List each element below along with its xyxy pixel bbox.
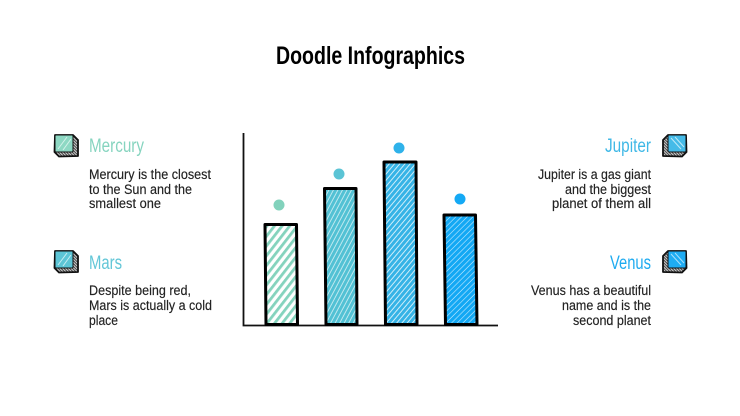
text: Mercury description	[89, 167, 211, 211]
text: Jupiter description: Jupiter is a gas giant	[538, 167, 651, 182]
title: Doodle Infographics	[276, 42, 465, 70]
icon: Mercury cube	[54, 135, 78, 156]
dot: Mercury	[274, 200, 284, 210]
text: Venus description: second planet	[573, 313, 651, 328]
bar: Mars	[324, 188, 357, 324]
heading: Mars: Mars	[89, 253, 122, 274]
icon: Venus cube	[663, 251, 686, 272]
bar: Jupiter	[384, 162, 417, 324]
text: Jupiter description: planet of them all	[552, 196, 651, 211]
panel: Venus	[531, 251, 686, 328]
dot: Jupiter	[394, 142, 404, 154]
text: Mars description: Despite being red,	[89, 283, 191, 298]
text: Venus description: Venus has a beautiful	[531, 283, 651, 298]
panel: Mars	[54, 251, 212, 328]
text: Jupiter description: and the biggest	[565, 182, 651, 197]
icon: Jupiter cube	[663, 135, 686, 156]
bar: Venus	[444, 215, 477, 324]
panel: Mercury	[54, 135, 211, 211]
text: Mars description	[89, 283, 212, 328]
text: Venus description	[531, 283, 651, 328]
dot: Mars	[334, 168, 344, 180]
text: Mercury description: to the Sun and the	[89, 182, 192, 197]
bar chart	[244, 133, 498, 326]
text: Mercury description: smallest one	[89, 196, 161, 211]
heading: Mercury: Mercury	[89, 136, 144, 157]
heading: Jupiter: Jupiter	[605, 136, 652, 157]
chart axes	[244, 133, 498, 326]
text: Mars description: Mars is actually a cold	[89, 298, 212, 313]
heading: Venus: Venus	[610, 253, 651, 274]
panel: Jupiter	[538, 135, 686, 211]
text: Venus description: name and is the	[562, 298, 651, 313]
text: Mercury description: Mercury is the closest	[89, 167, 211, 182]
text: Jupiter description	[538, 167, 651, 211]
dot: Venus	[454, 194, 466, 204]
icon: Mars cube	[54, 251, 78, 272]
bar: Mercury	[265, 224, 298, 324]
text: Mars description: place	[89, 313, 118, 328]
